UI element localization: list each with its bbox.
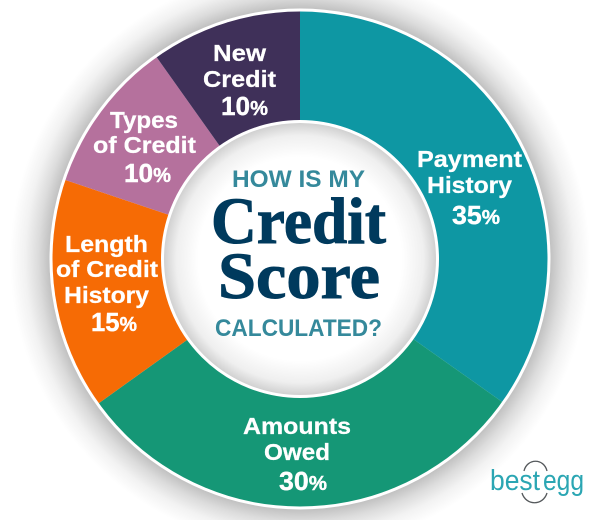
label: payment history 35%: 35% xyxy=(452,200,500,230)
label: payment history 35%: History xyxy=(427,172,512,198)
center heading: Credit xyxy=(211,185,386,258)
center heading: CALCULATED? xyxy=(215,315,382,342)
label: new credit 10%: 10% xyxy=(221,91,268,121)
label: types of credit 10%: of Credit xyxy=(93,132,196,158)
logo: best egg: egg xyxy=(543,465,584,497)
label: length of credit history 15%: of Credit xyxy=(56,256,158,282)
label: payment history 35%: Payment xyxy=(417,146,522,172)
label: amounts owed 30% xyxy=(243,413,351,496)
label: types of credit 10%: Types xyxy=(110,107,178,133)
segment: payment history xyxy=(300,12,548,402)
center heading: Score xyxy=(218,240,380,313)
label: types of credit 10% xyxy=(93,107,196,188)
label: amounts owed 30%: Amounts xyxy=(243,413,351,439)
label: new credit 10%: New xyxy=(213,40,266,66)
label: amounts owed 30%: Owed xyxy=(264,439,330,465)
logo: best egg: best xyxy=(490,465,540,497)
label: payment history 35% xyxy=(417,146,522,230)
label: amounts owed 30%: 30% xyxy=(279,466,327,496)
logo: best egg xyxy=(490,461,584,503)
segment: types of credit xyxy=(66,57,220,215)
center circle xyxy=(162,122,438,396)
label: types of credit 10%: 10% xyxy=(124,158,171,188)
label: length of credit history 15%: Length xyxy=(65,231,148,257)
label: length of credit history 15% xyxy=(56,231,158,337)
center heading: HOW IS MY xyxy=(232,166,365,193)
label: length of credit history 15%: History xyxy=(64,282,149,308)
label: new credit 10%: Credit xyxy=(203,66,276,92)
segment: length of credit history xyxy=(52,180,187,404)
center heading xyxy=(211,166,386,342)
label: new credit 10% xyxy=(203,40,276,121)
label: length of credit history 15%: 15% xyxy=(91,307,137,337)
segment: new credit xyxy=(156,12,300,146)
segment: amounts owed xyxy=(98,339,502,506)
